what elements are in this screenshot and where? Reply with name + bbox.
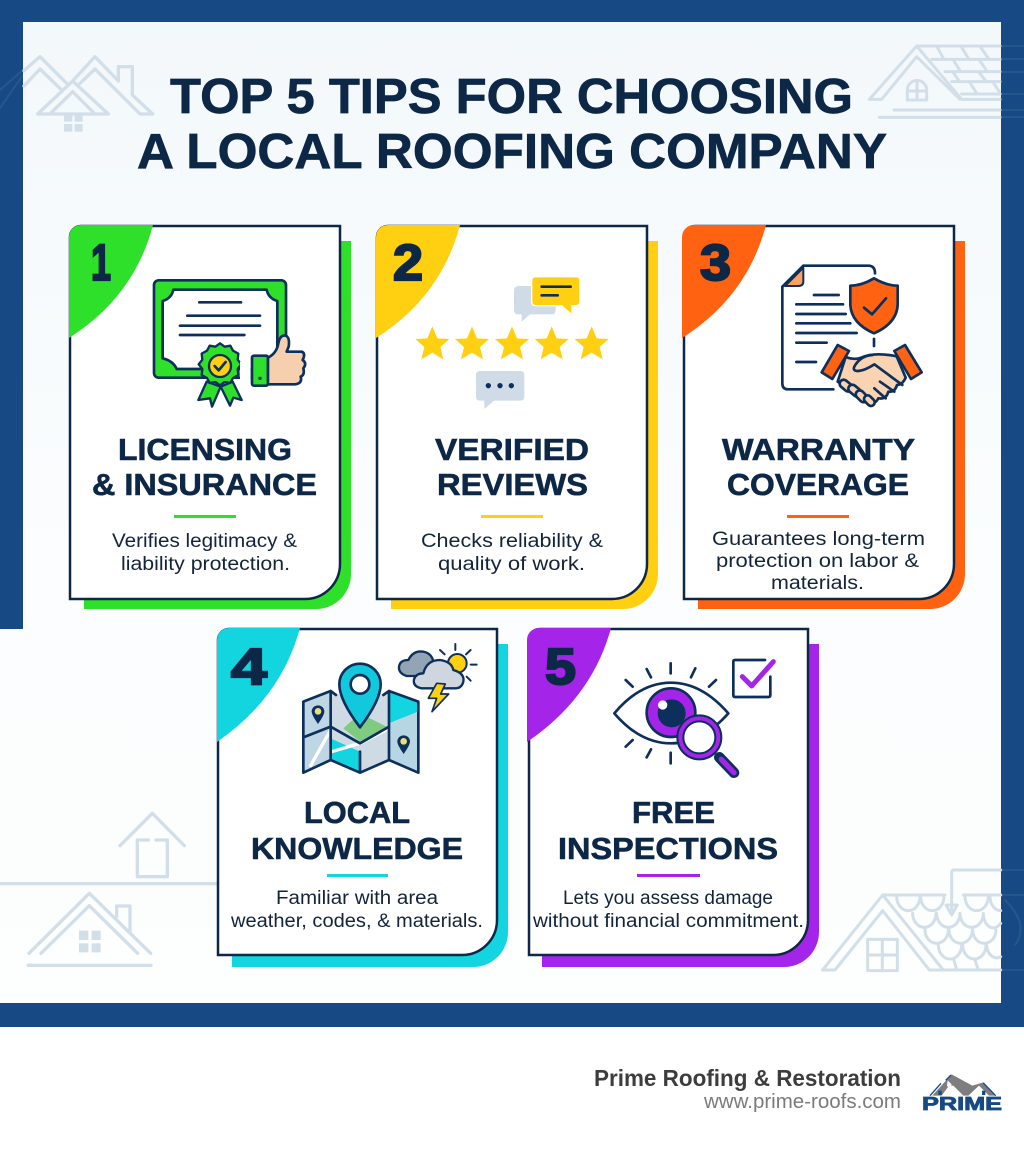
description 4: weather, codes, & materials. bbox=[230, 911, 483, 932]
heading 5: INSPECTIONS bbox=[558, 831, 778, 866]
card body 3 bbox=[684, 226, 954, 599]
heading 2 bbox=[435, 432, 589, 502]
description 1 bbox=[112, 531, 297, 575]
description 5: Lets you assess damage bbox=[563, 888, 773, 909]
divider 3 bbox=[787, 515, 849, 518]
card shadow 3 bbox=[698, 241, 965, 609]
heading 5: FREE bbox=[632, 795, 715, 830]
icon: certificate with thumbs up bbox=[154, 280, 305, 407]
card shadow 4 bbox=[232, 644, 508, 967]
background house: bottom left bbox=[28, 893, 151, 965]
divider 2 bbox=[481, 515, 543, 518]
icon: handshake bbox=[822, 345, 922, 408]
panel: tip 4 local knowledge bbox=[217, 628, 508, 967]
heading 4: KNOWLEDGE bbox=[251, 831, 463, 866]
heading 3 bbox=[722, 432, 915, 502]
number tab 1 bbox=[69, 225, 153, 338]
icon: stars and review bubbles bbox=[415, 277, 609, 409]
title: A LOCAL ROOFING COMPANY bbox=[137, 125, 887, 179]
logo: Prime roofing: PRIME bbox=[922, 1094, 1002, 1114]
number tab 2 bbox=[376, 225, 460, 338]
description 3: materials. bbox=[771, 573, 864, 594]
heading 1: LICENSING bbox=[118, 432, 292, 467]
background house: bottom right with scalloped shingles bbox=[823, 870, 1001, 971]
number tab 3 bbox=[682, 225, 766, 338]
card body 4 bbox=[218, 629, 497, 955]
icon: warranty document and shield bbox=[782, 266, 898, 389]
number 1: 1 bbox=[91, 234, 111, 291]
description 5 bbox=[532, 888, 804, 932]
background house: top right bbox=[869, 46, 1000, 117]
number 2: 2 bbox=[393, 234, 423, 291]
card body 2 bbox=[377, 226, 647, 599]
number 4: 4 bbox=[231, 638, 268, 695]
description 5: without financial commitment. bbox=[532, 911, 804, 932]
icon: eye, magnifier and checkbox bbox=[614, 660, 773, 773]
heading 5 bbox=[558, 795, 778, 866]
description 2: quality of work. bbox=[438, 554, 585, 575]
card shadow 2 bbox=[391, 241, 658, 609]
icon: map, pin and storm cloud bbox=[303, 644, 477, 773]
heading 2: VERIFIED bbox=[435, 432, 589, 467]
heading 3: COVERAGE bbox=[727, 467, 909, 502]
divider 4 bbox=[327, 874, 388, 877]
panel: tip 1 licensing and insurance bbox=[69, 225, 351, 609]
heading 3: WARRANTY bbox=[722, 432, 915, 467]
divider 5 bbox=[637, 874, 700, 877]
footer company name and website bbox=[594, 1065, 901, 1113]
heading 4: LOCAL bbox=[304, 795, 410, 830]
card body 5 bbox=[529, 629, 808, 955]
panel: tip 3 warranty coverage bbox=[682, 225, 965, 609]
title bbox=[137, 70, 887, 179]
number 5: 5 bbox=[545, 638, 576, 695]
description 3: protection on labor & bbox=[716, 551, 919, 572]
description 4: Familiar with area bbox=[276, 888, 438, 909]
description 2 bbox=[421, 531, 603, 575]
card body 1 bbox=[70, 226, 340, 599]
card shadow 1 bbox=[84, 241, 351, 609]
panel: tip 5 free inspections bbox=[527, 628, 819, 967]
background house: small outline left bbox=[0, 813, 217, 884]
number 3: 3 bbox=[700, 234, 731, 291]
description 2: Checks reliability & bbox=[421, 531, 603, 552]
description 3 bbox=[712, 529, 925, 594]
description 1: liability protection. bbox=[121, 554, 290, 575]
heading 1: & INSURANCE bbox=[92, 467, 317, 502]
description 4 bbox=[230, 888, 483, 932]
description 1: Verifies legitimacy & bbox=[112, 531, 297, 552]
number tab 4 bbox=[217, 628, 300, 742]
description 3: Guarantees long-term bbox=[712, 529, 925, 550]
heading 4 bbox=[251, 795, 463, 866]
divider 1 bbox=[174, 515, 236, 518]
heading 1 bbox=[92, 432, 317, 502]
number tab 5 bbox=[527, 628, 611, 742]
background house: top left bbox=[24, 57, 153, 132]
heading 2: REVIEWS bbox=[437, 467, 588, 502]
logo: Prime roofing bbox=[922, 1074, 1002, 1114]
card shadow 5 bbox=[542, 644, 819, 967]
footer company name and website: www.prime-roofs.com bbox=[703, 1091, 901, 1113]
title: TOP 5 TIPS FOR CHOOSING bbox=[170, 70, 853, 124]
panel: tip 2 verified reviews bbox=[376, 225, 658, 609]
footer company name and website: Prime Roofing & Restoration bbox=[594, 1065, 901, 1091]
